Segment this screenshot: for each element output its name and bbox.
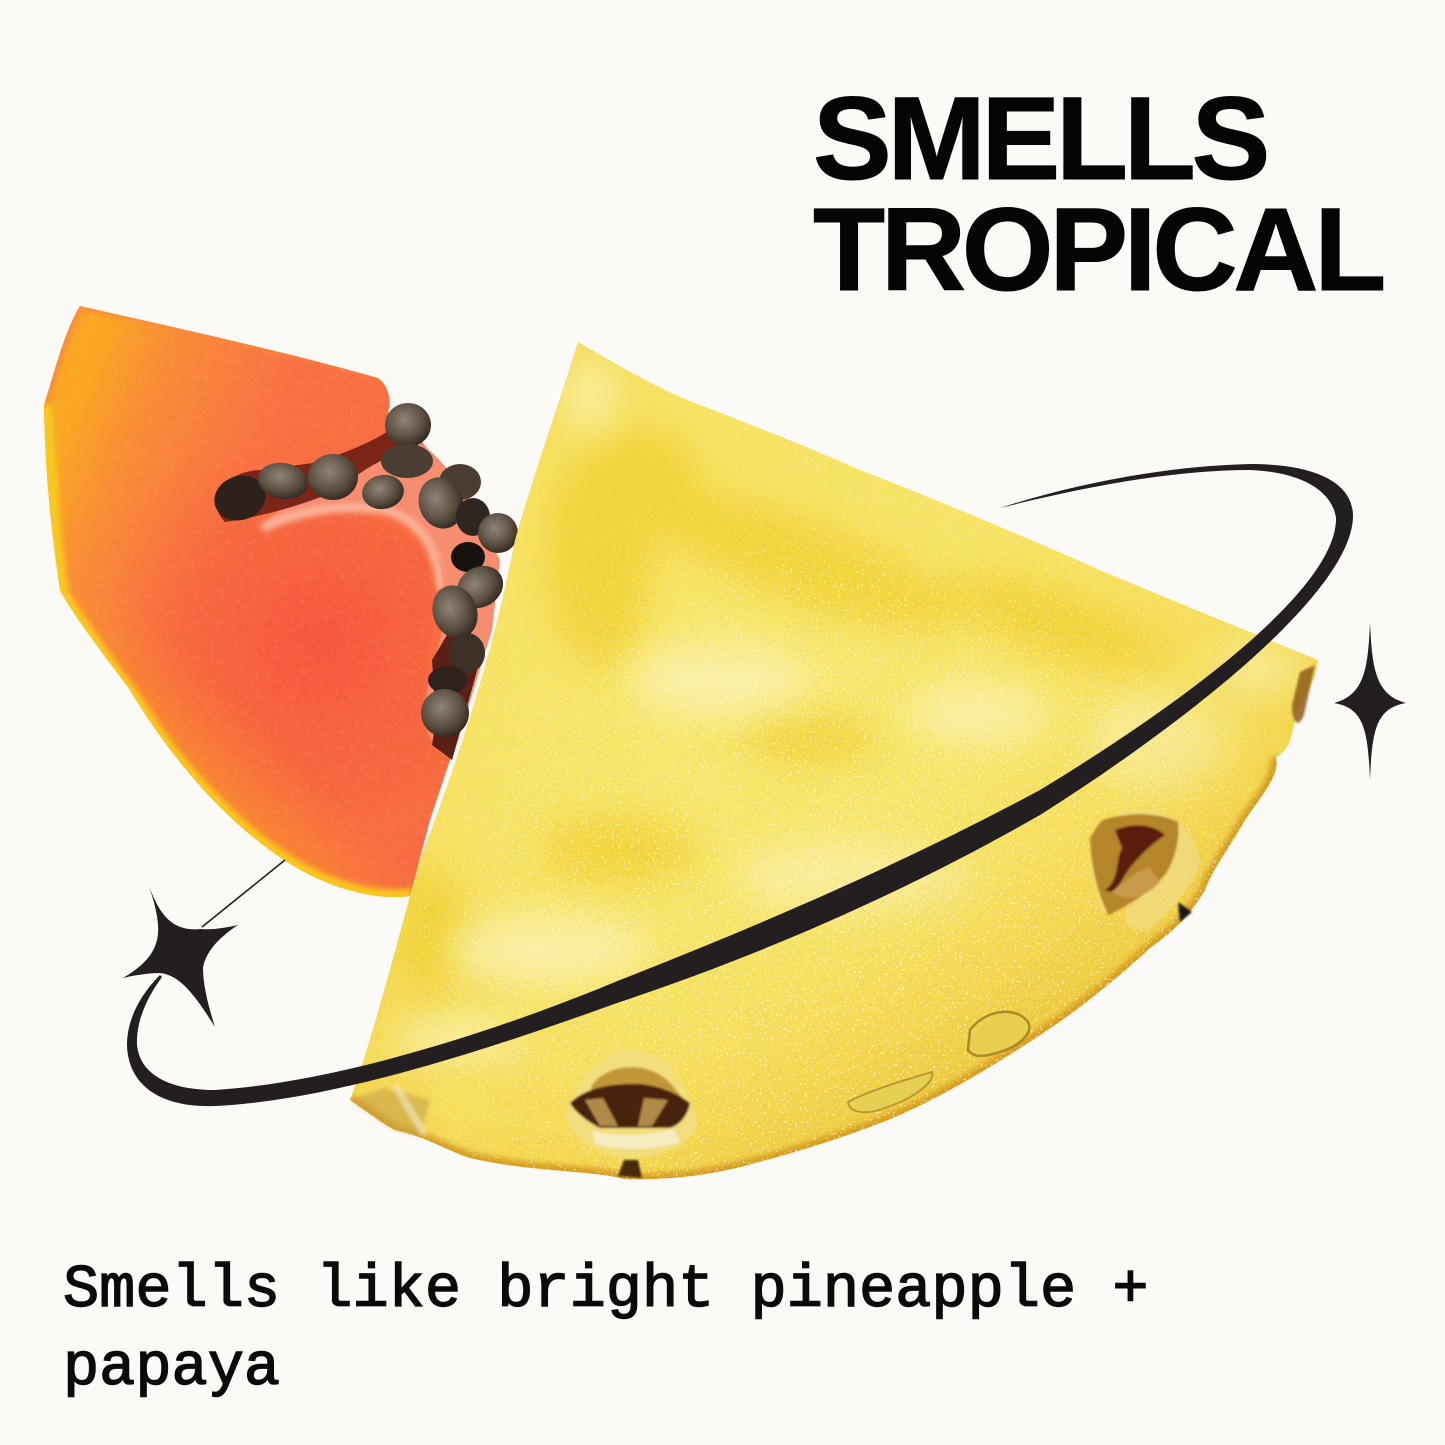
papaya slice bbox=[40, 300, 518, 900]
pineapple rind notches bbox=[618, 665, 1315, 1178]
title: TROPICAL bbox=[813, 184, 1382, 316]
description text: papaya bbox=[63, 1335, 280, 1403]
orbit ring bbox=[127, 464, 1353, 1106]
small four-point sparkle bbox=[1334, 622, 1406, 780]
pineapple eye: right bbox=[1090, 811, 1199, 931]
pineapple rind: bottom-left skin bbox=[350, 1085, 430, 1136]
description text: Smells like bright pineapple + bbox=[63, 1257, 1149, 1325]
large four-point star bbox=[123, 877, 238, 1027]
pineapple eye: bottom bbox=[565, 1050, 697, 1158]
papaya seed cavity bbox=[216, 425, 480, 760]
papaya seeds bbox=[208, 403, 518, 737]
title bbox=[813, 73, 1384, 316]
description text bbox=[63, 1257, 1149, 1403]
pineapple slice bbox=[340, 330, 1340, 1190]
title: SMELLS bbox=[813, 73, 1266, 205]
papaya pale pith around the cavity bbox=[262, 425, 500, 760]
